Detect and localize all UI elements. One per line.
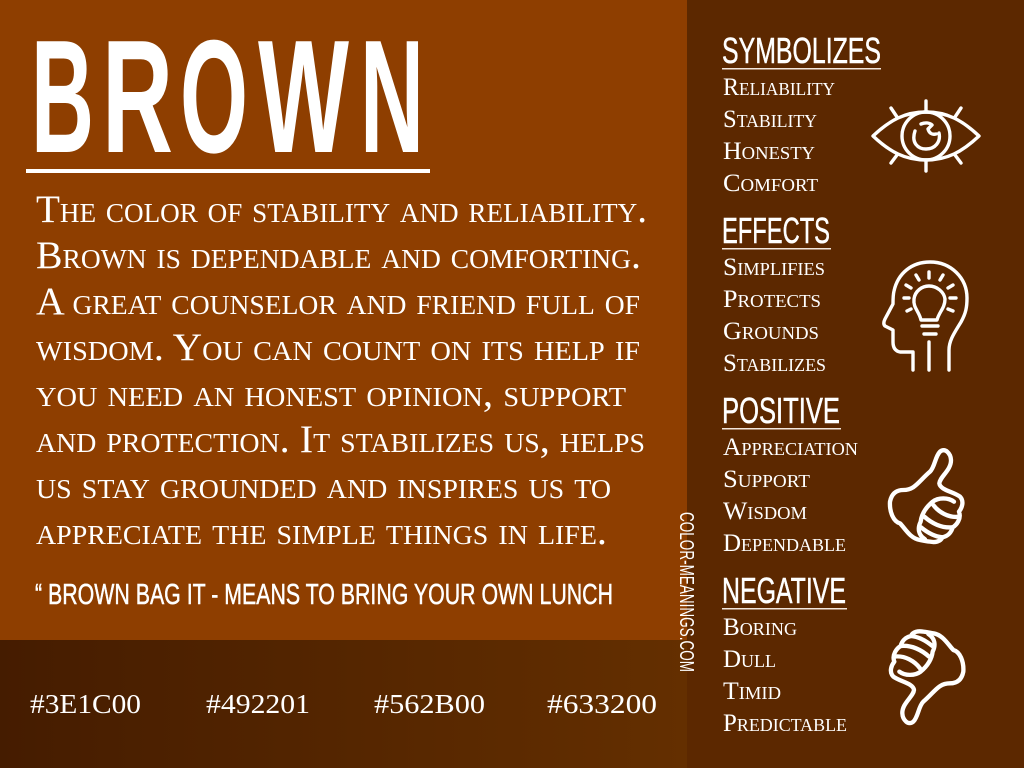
text block: description: appreciate the simple things in life. [36,510,607,553]
section: negative: Timid [723,678,781,705]
title: N [360,7,424,187]
icon: thumbs up [890,450,962,542]
text block: description [36,188,647,553]
section: negative: Predictable [723,710,847,737]
text block: description: and protection. It stabilizes us, helps [36,418,645,461]
section: effects: EFFECTS [722,210,830,251]
section: negative: Boring [723,614,797,641]
title: R [102,7,173,187]
website credit: COLOR-MEANINGS.COM [675,512,697,672]
icon: eye [873,101,979,171]
colour code labels: #492201 [206,689,310,719]
section: effects: Stabilizes [723,350,826,377]
section: symbolizes [722,30,881,197]
section: positive: Wisdom [723,498,807,525]
quote: “ BROWN BAG IT - MEANS TO BRING YOUR OWN LUNCH [35,579,613,611]
colour code labels: #562B00 [374,689,485,719]
text block: description: us stay grounded and inspires us to [36,464,611,507]
icon: head with light bulb [884,262,967,370]
panel: right sidebar [687,0,1024,768]
section: positive: POSITIVE [722,390,840,431]
section: negative: Dull [723,646,776,673]
section: effects: Simplifies [723,254,825,281]
colour code labels: #3E1C00 [30,689,141,719]
section: symbolizes: Stability [723,106,817,133]
title: O [180,7,248,187]
section: positive: Appreciation [723,434,858,461]
section: effects: Protects [723,286,821,313]
section: negative: NEGATIVE [722,570,846,611]
section: symbolizes: Honesty [723,138,815,165]
text block: description: The color of stability and reliability. [36,188,647,231]
colour code labels: #633200 [547,689,657,719]
text block: description: you need an honest opinion, support [36,372,627,415]
section: positive: Dependable [723,530,846,557]
title: B [31,7,94,187]
icon: thumbs down [891,631,963,723]
section: symbolizes: SYMBOLIZES [722,30,881,71]
panel: main orange background [0,0,687,640]
title: W [258,7,349,187]
colour code labels [30,689,657,719]
section: symbolizes: Reliability [723,74,835,101]
section: symbolizes: Comfort [723,170,818,197]
panel: colour code band [0,640,687,768]
section: positive: Support [723,466,810,493]
section: effects: Grounds [723,318,819,345]
section: negative [722,570,847,737]
text block: description: wisdom. You can count on its help if [36,326,640,369]
text block: description: A great counselor and friend full of [36,280,640,323]
title [31,7,424,187]
text block: description: Brown is dependable and comforting. [36,234,641,277]
title underline [26,169,430,173]
section: positive [722,390,858,557]
section: effects [722,210,831,377]
